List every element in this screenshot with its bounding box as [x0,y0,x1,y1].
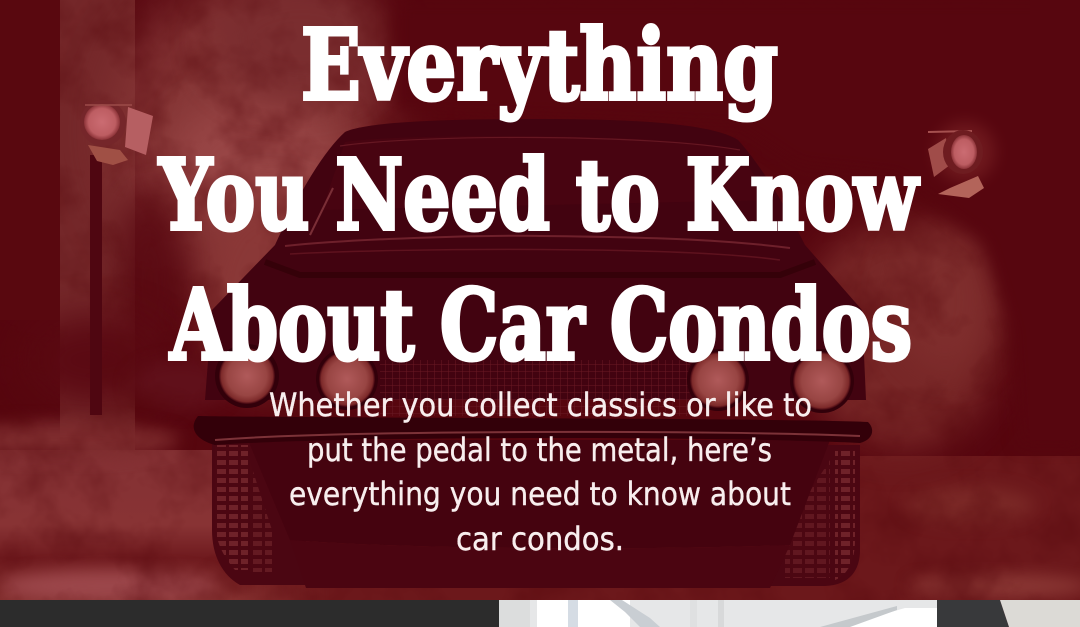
car: tires [212,440,306,585]
car: hood highlights [285,236,790,248]
intro line 1: Whether you collect classics or like to [269,386,812,424]
studio light: left [80,100,153,415]
floor: wet garage floor [0,422,1080,602]
car: front bumper [194,416,872,445]
next section: dark column [937,600,1009,627]
car: lower valance [248,440,830,548]
car: cabin and windshield [205,119,866,400]
smoke: right cloud [800,220,1000,450]
car: headlights [215,344,279,408]
car: classic muscle car front [194,119,872,588]
title line 1: Everything [301,8,778,122]
smoke: left cloud [25,0,390,410]
next section: interior photo with windows [499,600,937,627]
studio light: right [928,122,995,198]
intro line 2: put the pedal to the metal, here’s [307,431,772,469]
car: shadow under valance [290,540,790,588]
intro paragraph [269,386,812,558]
intro line 4: car condos. [456,520,624,558]
next section: pale wall [1000,600,1080,627]
title [158,8,920,382]
intro line 3: everything you need to know about [289,475,791,513]
car: grille [380,360,690,416]
background: top right dark wall [395,0,1080,445]
next section: dark panel [0,600,499,627]
